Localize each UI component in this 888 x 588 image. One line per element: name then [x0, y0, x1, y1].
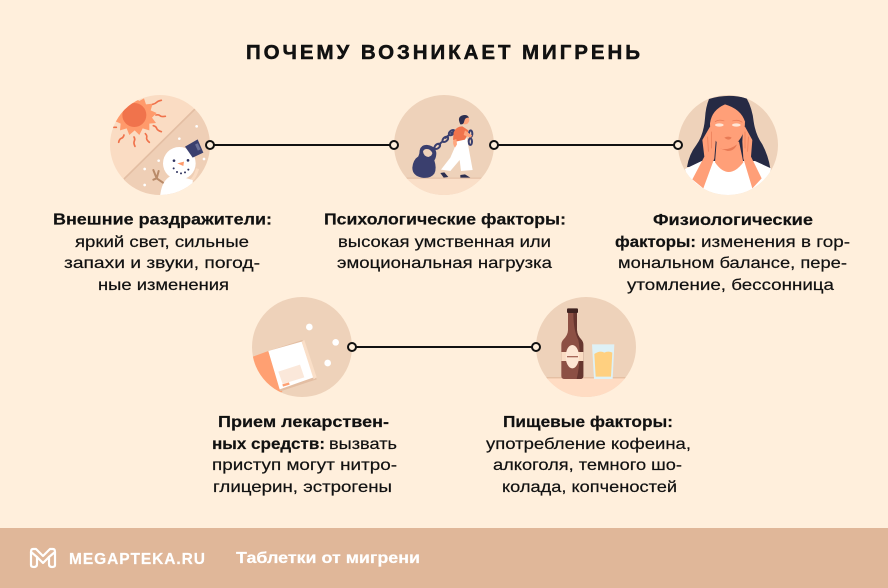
text: physiological factors: мональном балансе, пере-: [618, 255, 847, 272]
connector: bottom row: [348, 343, 540, 351]
text: medication: глицерин, эстрогены: [213, 479, 392, 496]
text: food factors: Пищевые факторы:: [503, 414, 673, 431]
logo wordmark: MEGAPTEKA.RU: [69, 551, 205, 568]
text: external triggers: [53, 212, 272, 294]
icon: logo: [31, 549, 55, 567]
text: physiological factors: изменения в гор-: [701, 234, 850, 251]
text: physiological factors: [615, 212, 850, 294]
text: medication: приступ могут нитро-: [212, 457, 397, 474]
connector: top row right: [490, 141, 682, 149]
text: psychological factors: [324, 212, 566, 272]
text: food factors: алкоголя, темного шо-: [493, 457, 682, 474]
text: psychological factors: высокая умственная или: [338, 234, 551, 251]
footer link: Таблетки от мигрени: [236, 550, 420, 567]
title: ПОЧЕМУ ВОЗНИКАЕТ МИГРЕНЬ: [246, 41, 640, 64]
text: food factors: колада, копченостей: [502, 479, 677, 496]
icon: woman dragging kettlebell: [394, 95, 494, 195]
icon: medicine box and pills: [252, 297, 352, 397]
connector: top row left: [206, 141, 398, 149]
text: medication: Прием лекарствен-: [218, 414, 389, 431]
text: external triggers: запахи и звуки, погод-: [64, 255, 260, 272]
text: external triggers: яркий свет, сильные: [75, 234, 249, 251]
text: physiological factors: факторы:: [615, 234, 696, 251]
icon: woman with headache: [678, 95, 778, 195]
text: food factors: употребление кофеина,: [486, 436, 691, 453]
icon: sun and snowman: [110, 95, 213, 200]
icon: beer bottle and glass: [536, 297, 636, 397]
text: psychological factors: Психологические факторы:: [324, 212, 566, 228]
text: medication: [212, 414, 397, 496]
text: medication: вызвать: [329, 436, 397, 453]
text: external triggers: ные изменения: [98, 277, 229, 294]
text: external triggers: Внешние раздражители:: [53, 212, 272, 228]
text: food factors: [486, 414, 691, 496]
text: medication: ных средств:: [212, 436, 325, 453]
text: physiological factors: утомление, бессонница: [627, 277, 834, 294]
footer band: [0, 528, 888, 588]
text: physiological factors: Физиологические: [653, 212, 813, 229]
text: psychological factors: эмоциональная нагрузка: [337, 255, 552, 272]
